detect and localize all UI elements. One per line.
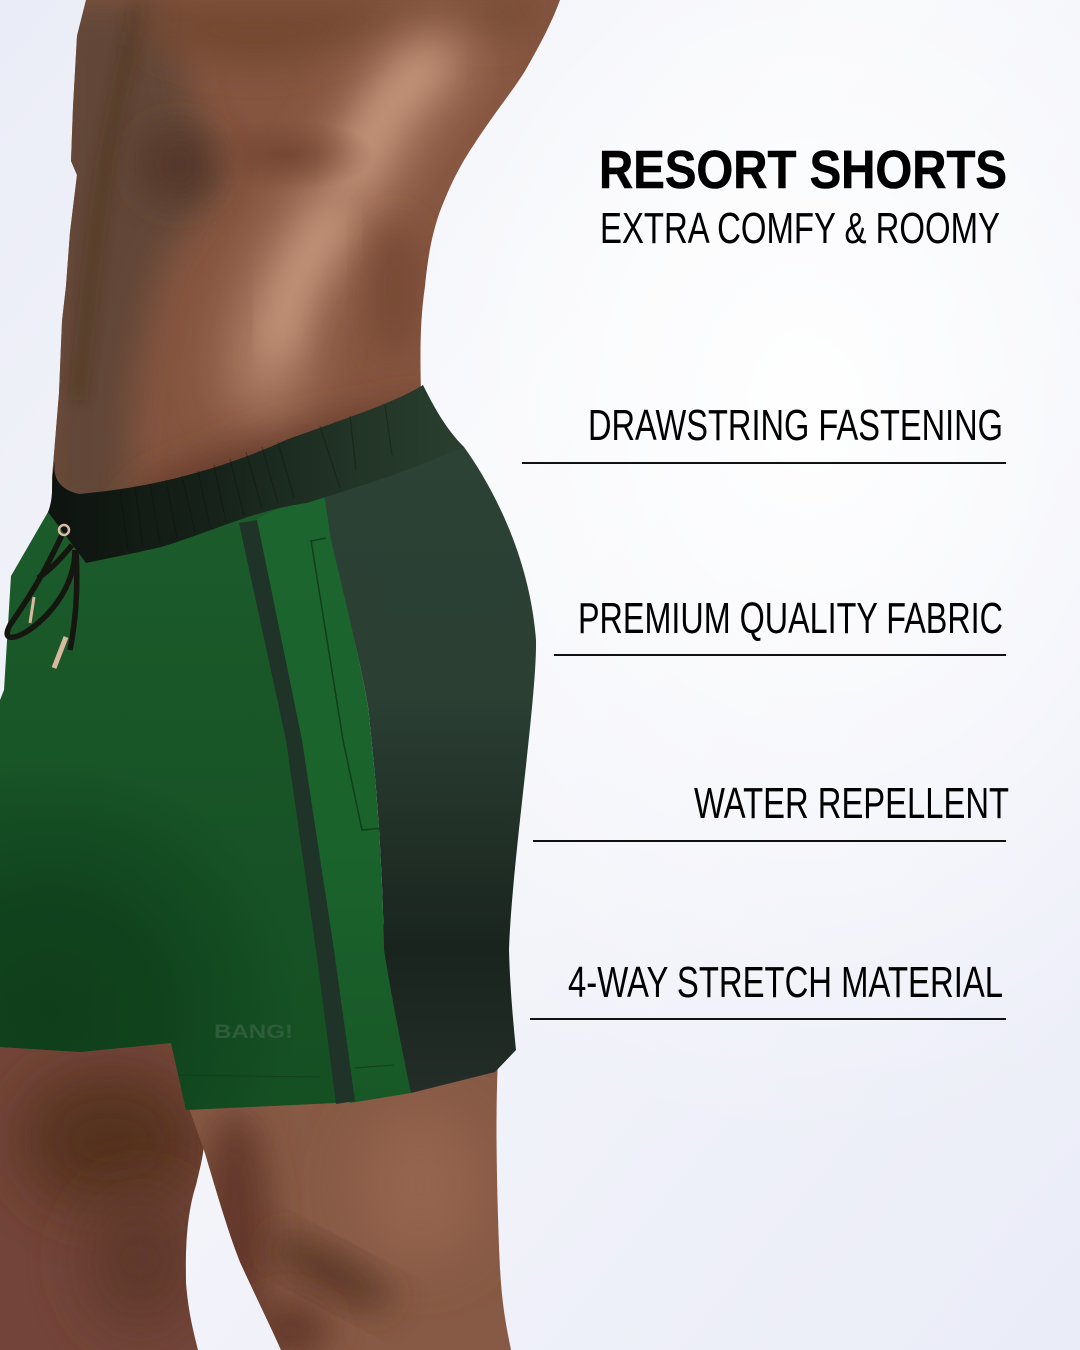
photo: model wearing green resort shorts [0, 0, 580, 1350]
front fabric [0, 490, 411, 1110]
rear dark panel [316, 430, 536, 1093]
pocket stitch [311, 538, 382, 830]
title block [599, 140, 1007, 253]
hem brand mark: BANG! [214, 1022, 293, 1043]
hairy abdomen shading [40, 0, 217, 520]
dark piping [239, 520, 355, 1104]
far leg shadow [0, 490, 411, 1110]
waistband [48, 385, 464, 563]
drawstring ring and tips [30, 525, 69, 668]
body crease [78, 0, 139, 400]
side green stripe [252, 494, 411, 1103]
drawstring [7, 535, 77, 650]
shorts [0, 385, 536, 1110]
lower belly shadow [136, 394, 404, 486]
hem stitch [178, 1065, 394, 1077]
top chest shade [156, 0, 522, 67]
dark oblique shadow [138, 127, 218, 203]
mid torso shadow [247, 133, 364, 182]
front leg [190, 1069, 511, 1350]
continuous skin highlight [265, 55, 440, 385]
back leg [0, 1043, 204, 1350]
waistband wrinkles [120, 405, 392, 550]
heading: RESORT SHORTS [599, 140, 1007, 200]
torso [52, 0, 560, 494]
